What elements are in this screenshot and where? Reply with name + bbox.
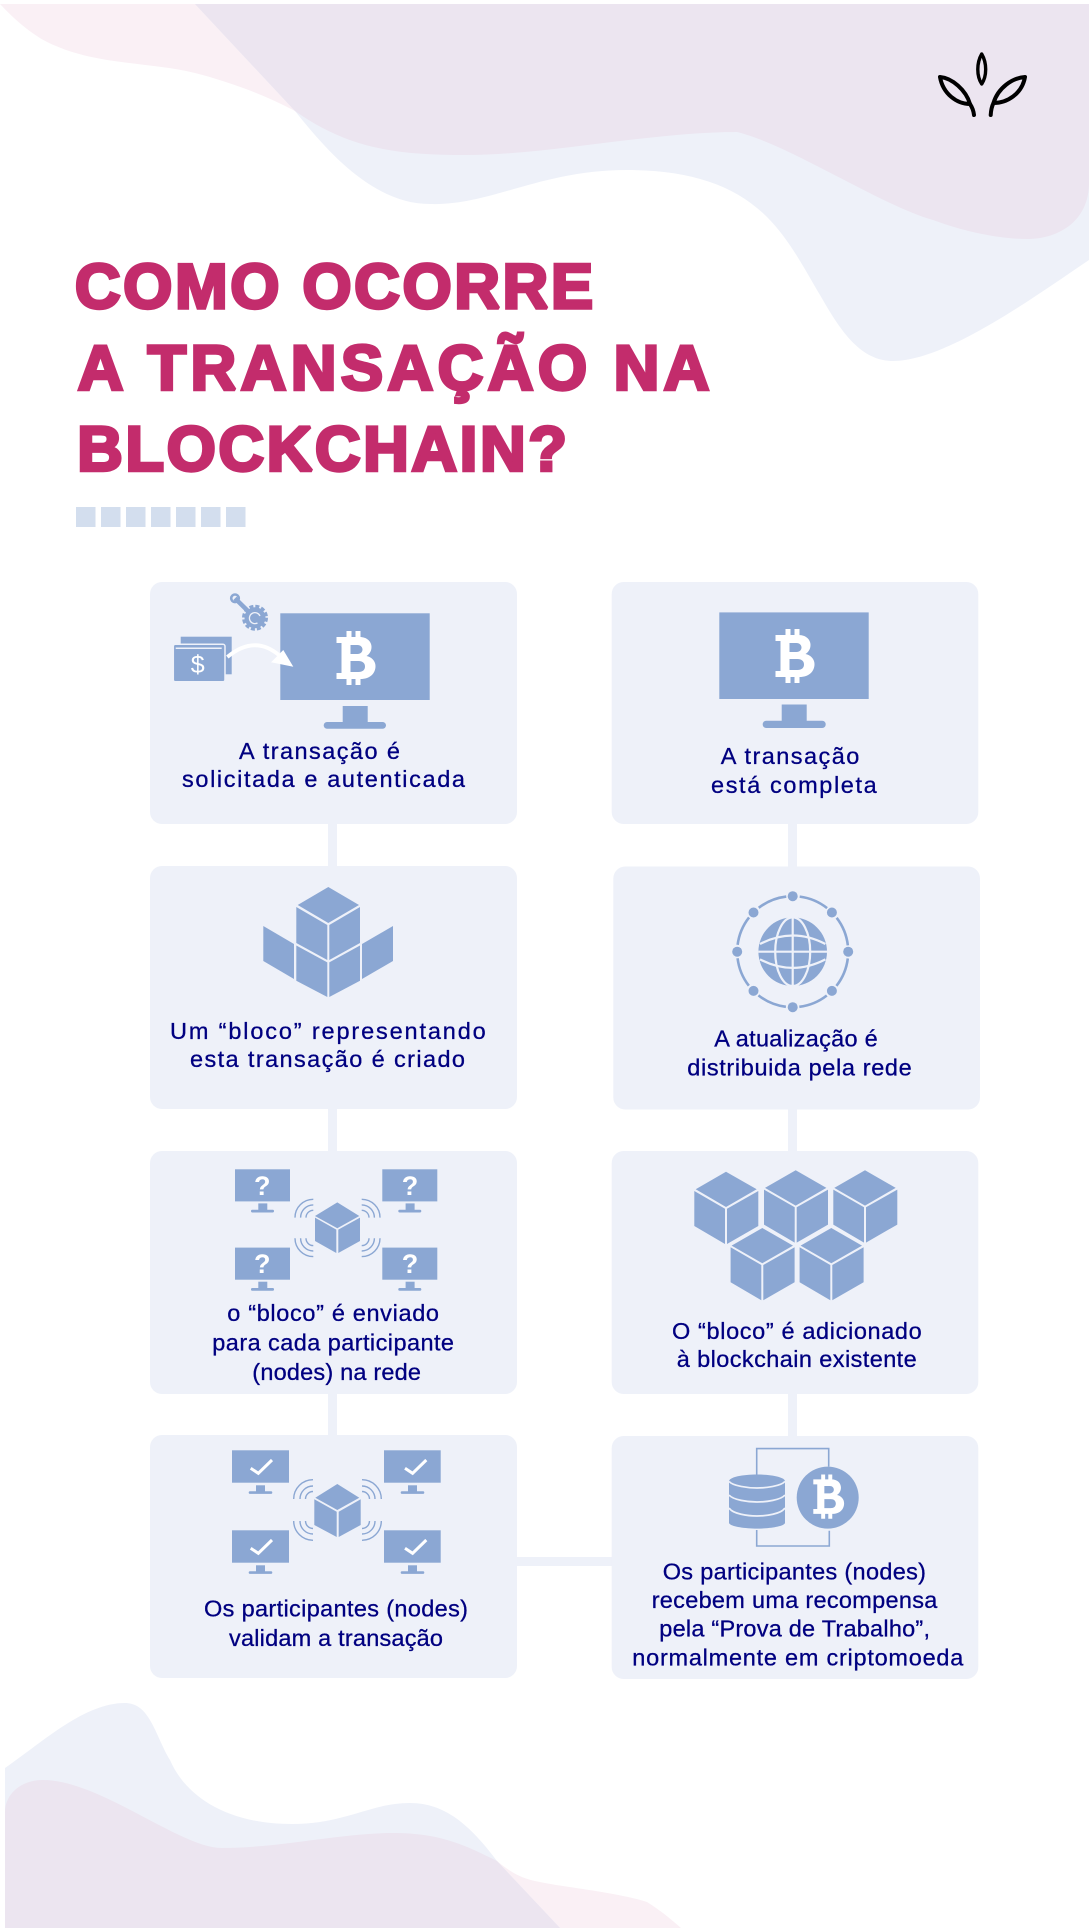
icon: stacked blocks — [263, 887, 393, 997]
text: step label — [182, 738, 466, 792]
icon: central block — [314, 1484, 361, 1537]
icon: wallet with dollar — [173, 637, 232, 682]
icon: wallet with dollar: $ — [191, 651, 205, 679]
title accent squares — [76, 507, 246, 527]
panel: transaction complete — [612, 582, 978, 824]
icon: signal waves — [294, 1480, 381, 1540]
icon: four monitors with question marks: ? — [402, 1249, 418, 1279]
icon: gear and wrench — [231, 594, 266, 629]
text: step label — [212, 1300, 454, 1385]
text: step label — [204, 1596, 468, 1651]
icon: connecting lines — [757, 1449, 829, 1546]
title — [75, 252, 709, 484]
text: step label: Os participantes (nodes) — [663, 1559, 926, 1585]
arrow: wallet to monitor — [227, 645, 293, 667]
panel: update distributed across the network — [613, 866, 980, 1110]
panel: nodes validate the transaction — [150, 1435, 517, 1678]
icon: monitor with bitcoin — [719, 612, 869, 728]
flow connectors — [328, 820, 797, 1566]
icon: four monitors with question marks: ? — [254, 1171, 271, 1201]
top background waves — [0, 4, 1089, 361]
text: step label — [672, 1318, 922, 1372]
bottom background waves — [5, 1703, 681, 1928]
text: step label: (nodes) na rede — [252, 1359, 421, 1385]
panel: nodes receive reward — [612, 1436, 978, 1679]
title: BLOCKCHAIN? — [77, 414, 567, 484]
text: step label — [632, 1559, 964, 1670]
text: step label: Um “bloco” representando — [170, 1018, 486, 1044]
text: step label: distribuida pela rede — [687, 1054, 912, 1080]
text: step label: o “bloco” é enviado — [227, 1300, 439, 1326]
text: step label: solicitada e autenticada — [182, 766, 466, 792]
text: step label: pela “Prova de Trabalho”, — [659, 1616, 930, 1642]
text: step label — [170, 1018, 486, 1072]
icon: four monitors with question marks: ? — [402, 1171, 418, 1201]
title: COMO OCORRE — [75, 252, 593, 322]
text: step label: A atualização é — [714, 1026, 878, 1052]
text: step label — [687, 1026, 912, 1080]
icon: signal waves — [295, 1199, 380, 1257]
icon: four monitors with check marks — [232, 1450, 441, 1574]
text: step label: Os participantes (nodes) — [204, 1596, 468, 1622]
text: step label: validam a transação — [229, 1625, 443, 1651]
icon: database — [729, 1474, 785, 1529]
text: step label: à blockchain existente — [677, 1346, 917, 1372]
text: step label: A transação — [721, 743, 859, 769]
title: A TRANSAÇÃO NA — [78, 332, 709, 403]
text: step label: recebem uma recompensa — [652, 1587, 938, 1613]
panel: block created — [150, 866, 517, 1109]
text: step label: O “bloco” é adicionado — [672, 1318, 922, 1344]
icon: chain of five blocks — [694, 1170, 897, 1300]
panel: transaction requested and authenticated — [150, 582, 517, 824]
icon: globe with network ring — [732, 891, 853, 1012]
text: step label — [711, 743, 878, 798]
icon: monitor with bitcoin — [280, 613, 430, 729]
icon: central block — [315, 1202, 360, 1253]
text: step label: está completa — [711, 772, 878, 798]
icon: bitcoin coin — [797, 1467, 859, 1529]
panel: block added to the blockchain — [612, 1151, 978, 1394]
text: step label: A transação é — [239, 738, 400, 764]
text: step label: para cada participante — [212, 1330, 454, 1356]
icon: logo with three leaves — [940, 54, 1025, 115]
panel: block sent to each node — [150, 1151, 517, 1394]
text: step label: normalmente em criptomoeda — [632, 1644, 964, 1670]
icon: four monitors with question marks — [235, 1169, 437, 1291]
text: step label: esta transação é criado — [190, 1046, 465, 1072]
icon: four monitors with question marks: ? — [254, 1249, 271, 1279]
